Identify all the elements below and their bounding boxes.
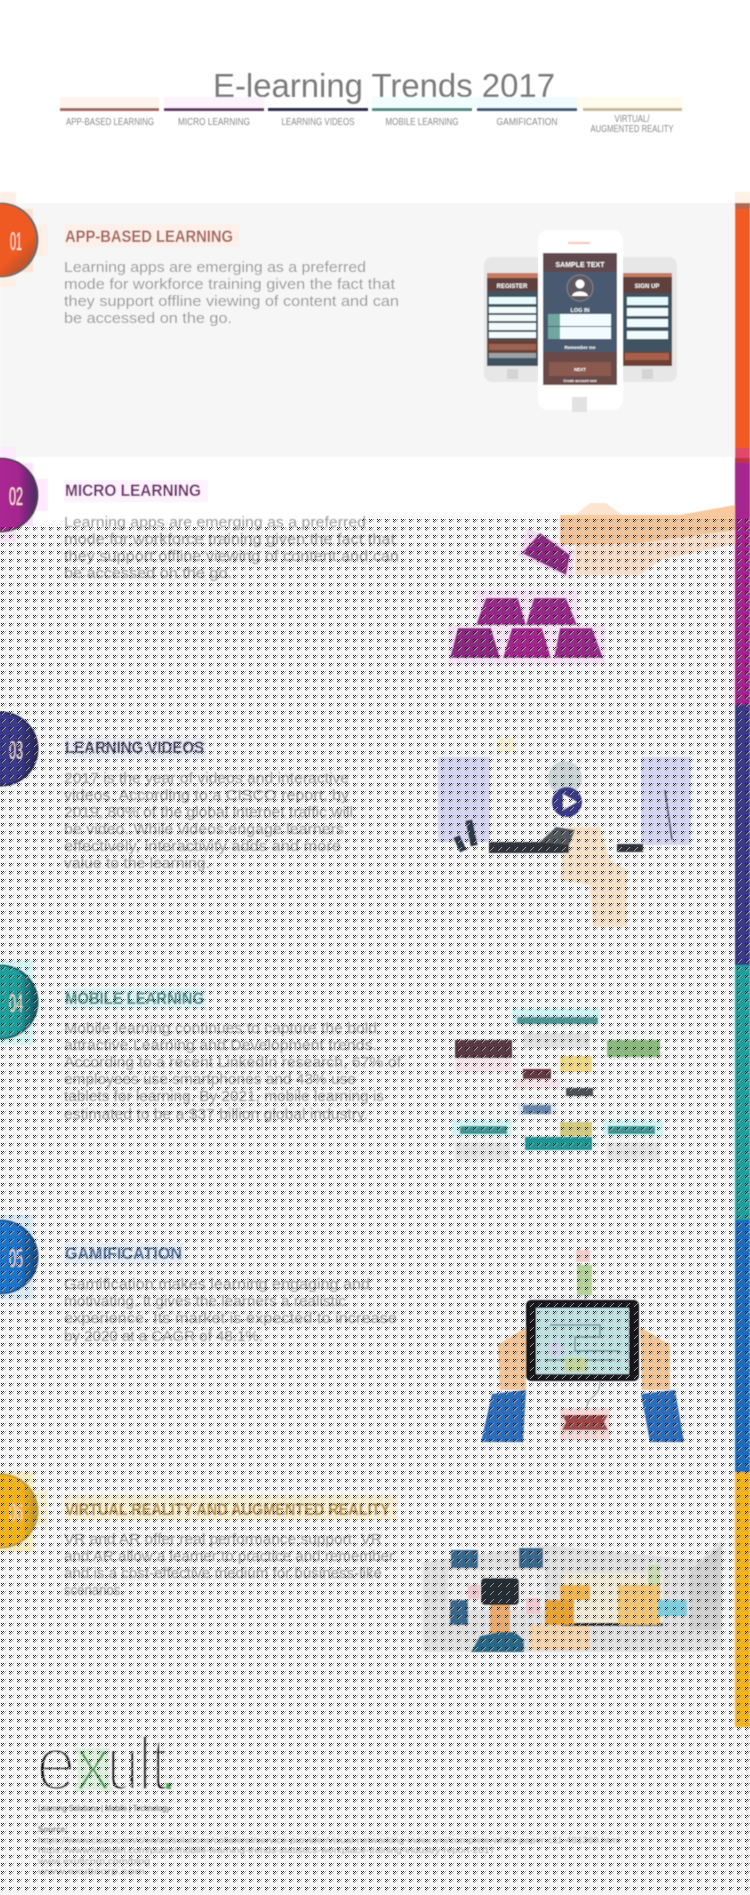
panel: mobile learning xyxy=(0,960,663,1160)
badge 03 xyxy=(0,712,38,786)
heading: GAMIFICATION xyxy=(65,1244,182,1263)
body text: Gamification makes learning engaging and xyxy=(64,1276,370,1293)
icon: video player and hand xyxy=(438,738,691,927)
navigation legend: LEARNING VIDEOS xyxy=(282,116,354,128)
panel: gamification xyxy=(0,1215,684,1442)
sources: https://www.cisco.com/c/en/us/solutions/collateral/service-provider/visual-networking-index-vni/complete-white-paper-c11-481360.html xyxy=(38,1836,620,1845)
sources: Source: xyxy=(38,1825,68,1834)
body text: videos. According to a CISCO report, by xyxy=(64,787,350,804)
body text: scenarios. xyxy=(64,1582,124,1599)
body text: Mobile learning continues to capture the bold xyxy=(64,1020,377,1037)
navigation legend: MOBILE LEARNING xyxy=(386,116,458,128)
icon: hand lifting cup xyxy=(518,503,735,580)
icon: mobile phones: SAMPLE TEXT xyxy=(555,262,605,269)
icon: mobile phones: Remember me xyxy=(564,345,596,350)
body text: Learning apps are emerging as a preferred xyxy=(64,514,366,531)
body text: be accessed on the go. xyxy=(64,565,232,582)
title: E-learning Trends 2017 xyxy=(213,67,555,104)
navigation legend: MICRO LEARNING xyxy=(178,116,250,128)
icon: mobile phones xyxy=(484,230,677,412)
sources xyxy=(36,1825,620,1876)
body text: VR and AR offer real performance support. VR xyxy=(64,1531,382,1548)
badge 03: 03 xyxy=(9,737,23,765)
body text: experience. Its market is expected to increase xyxy=(64,1310,397,1327)
panel: learning videos xyxy=(0,712,691,927)
body text xyxy=(64,1531,394,1599)
right colour rail xyxy=(735,192,750,1727)
body text: According to a recent LinkedIn research, 67% of xyxy=(64,1054,402,1071)
badge 05 xyxy=(0,1215,38,1300)
badge 01 xyxy=(0,192,48,287)
body text: by 2020 at a CAGR of 48.1%. xyxy=(64,1328,263,1345)
body text xyxy=(64,1020,402,1123)
icon: mobile phones: Create account now xyxy=(563,379,597,383)
heading xyxy=(64,1495,397,1520)
body text: attractive Learning and Development trends. xyxy=(64,1037,377,1054)
body text xyxy=(64,1276,397,1345)
body text: Learning apps are emerging as a preferred xyxy=(64,259,366,276)
badge 06: 06 xyxy=(9,1499,23,1527)
badge 05: 05 xyxy=(9,1245,23,1273)
panel: virtual and augmented reality xyxy=(0,1472,722,1652)
badge 02 xyxy=(0,447,48,542)
badge 01: 01 xyxy=(10,228,22,256)
tagline: Learning Solutions | Mobile | Technology xyxy=(38,1804,170,1813)
diagram: mobile learning flow xyxy=(452,1008,663,1160)
icon: hands holding tablet xyxy=(481,1250,684,1442)
logo: exult xyxy=(36,1722,171,1807)
body text: be video. While videos engage learners xyxy=(64,821,344,838)
navigation legend xyxy=(60,97,682,135)
body text: 2017 is the year of videos and interactive xyxy=(64,770,349,787)
badge 04: 04 xyxy=(9,990,23,1018)
heading: MICRO LEARNING xyxy=(65,481,201,500)
logo: exult: ult xyxy=(107,1722,167,1807)
body text: motivating. It gives the learners a realistic xyxy=(64,1293,347,1310)
icon: mobile phones: REGISTER xyxy=(497,284,528,290)
body text xyxy=(64,514,399,582)
navigation legend: AUGMENTED REALITY xyxy=(590,123,674,135)
sources: www.exultcorp.com/blog xyxy=(37,1857,150,1866)
badge 02: 02 xyxy=(9,483,23,511)
sources: https://www.linkedin.com/pulse/mobile-learning-trends-statistics-workplace-training-industry-report-2017 xyxy=(38,1846,496,1855)
body text: employees use smartphones and 43% use xyxy=(64,1071,356,1088)
icon: stacked cups xyxy=(448,590,605,665)
logo: exult: x xyxy=(75,1722,111,1807)
panel: app-based learning xyxy=(0,192,735,457)
body text: estimated to be a $37 billion global industry. xyxy=(64,1106,368,1123)
heading: LEARNING VIDEOS xyxy=(65,738,204,757)
body text xyxy=(64,259,399,327)
heading: VIRTUAL REALITY AND AUGMENTED REALITY xyxy=(65,1500,391,1519)
sources: www.exultcorp.com xyxy=(36,1867,146,1876)
icon: mobile phones: NEXT xyxy=(574,367,586,372)
body text: they support offline viewing of content and can xyxy=(64,548,399,565)
navigation legend: GAMIFICATION xyxy=(496,116,558,128)
navigation legend: APP-BASED LEARNING xyxy=(66,116,154,128)
body text: effectively, interactivity adds and more xyxy=(64,838,341,855)
heading: APP-BASED LEARNING xyxy=(65,227,233,246)
body text: they support offline viewing of content and can xyxy=(64,293,399,310)
body text: and is a cost-effective medium for business-like xyxy=(64,1565,382,1582)
body text: be accessed on the go. xyxy=(64,310,232,327)
navigation legend: VIRTUAL/ xyxy=(614,113,650,125)
body text: value to the learning. xyxy=(64,855,210,872)
panel: micro learning xyxy=(0,447,735,665)
heading: MOBILE LEARNING xyxy=(65,989,204,1008)
body text xyxy=(64,770,353,872)
body text: and AR allow a learner to practice and remember xyxy=(64,1548,394,1565)
body text: mode for workforce training given the fact that xyxy=(64,276,396,293)
badge 04 xyxy=(0,960,38,1045)
body text: tablets for learning. By 2021, mobile learning is xyxy=(64,1088,384,1105)
icon: mobile phones: LOG IN xyxy=(571,308,589,314)
logo: exult: e xyxy=(36,1722,76,1807)
body text: 2019, 80% of the global internet traffic will xyxy=(64,804,353,821)
badge 06 xyxy=(0,1472,48,1552)
illustration: VR headset user and room xyxy=(423,1540,722,1652)
icon: mobile phones: SIGN UP xyxy=(635,284,659,290)
body text: mode for workforce training given the fact that xyxy=(64,531,396,548)
